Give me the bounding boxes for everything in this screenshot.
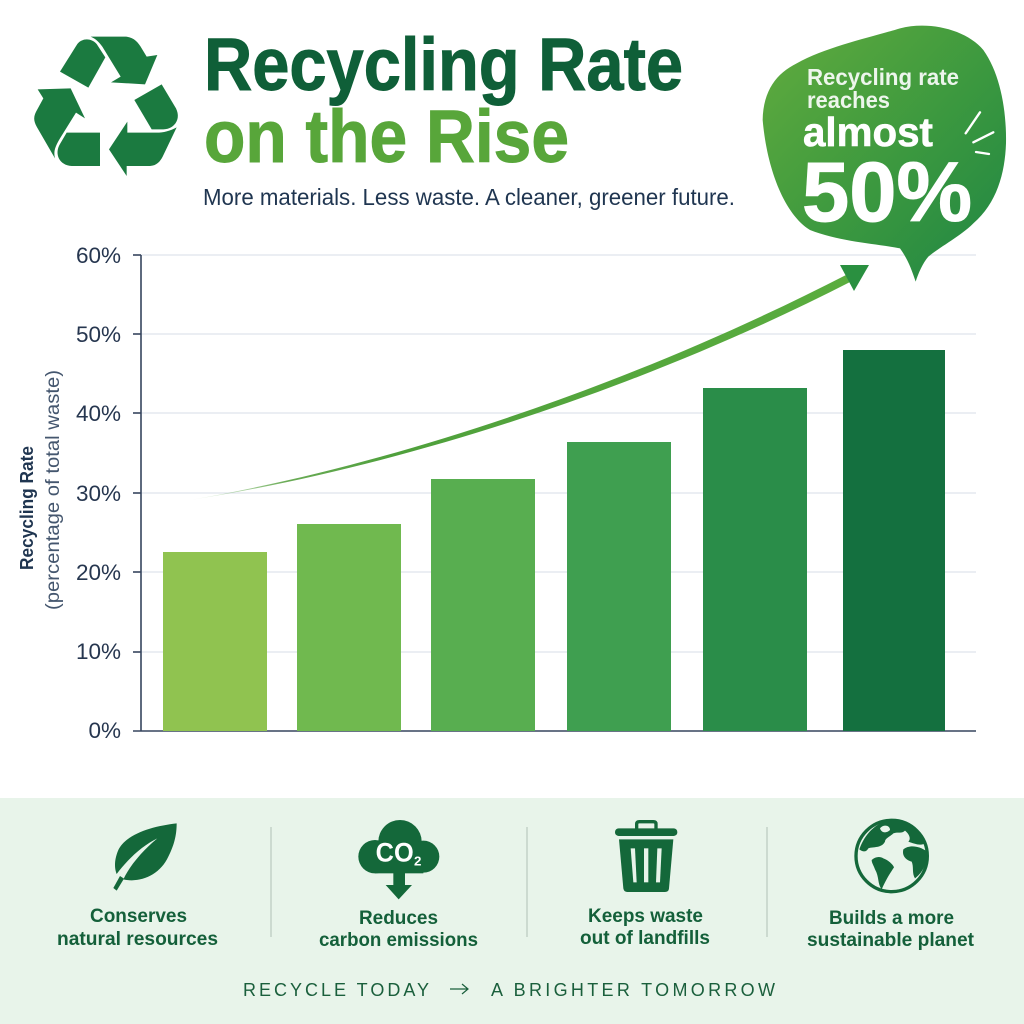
label: conserves: natural resources <box>57 928 218 950</box>
benefit: keeps waste out of landfills <box>580 822 710 949</box>
tagline: RECYCLE TODAY <box>243 980 429 1000</box>
benefit: builds a more sustainable planet <box>807 820 974 951</box>
label: builds: sustainable planet <box>807 929 974 951</box>
trend arrow <box>190 265 869 500</box>
label: conserves: Conserves <box>90 905 187 927</box>
y axis title: Recycling Rate <box>17 446 37 570</box>
icon: CO2 cloud: 2 <box>414 854 421 869</box>
y axis title: (percentage of total waste) <box>43 370 64 610</box>
y axis value labels: 50% <box>76 322 121 347</box>
label: keeps waste <box>580 905 710 949</box>
y axis gridlines and ticks <box>141 255 976 652</box>
icon: leaf <box>113 823 177 891</box>
benefit: reduces carbon emissions <box>319 820 478 951</box>
title <box>204 23 683 178</box>
tagline <box>243 980 775 1000</box>
label: keeps waste: out of landfills <box>580 927 710 949</box>
title: on the Rise <box>204 95 569 178</box>
callout bubble: reaches <box>807 87 890 113</box>
benefit: conserves natural resources <box>57 823 218 950</box>
label: builds <box>807 907 974 951</box>
icon: CO2 cloud <box>358 820 439 899</box>
icon detail: light land patch <box>880 826 890 832</box>
subtitle: More materials. Less waste. A cleaner, greener future. <box>203 184 735 210</box>
icon: globe <box>856 820 927 892</box>
tagline: A BRIGHTER TOMORROW <box>491 980 775 1000</box>
label: keeps waste: Keeps waste <box>588 905 703 927</box>
label: reduces: Reduces <box>359 907 438 929</box>
callout bubble: 50% <box>802 145 972 239</box>
axis lines <box>133 255 976 731</box>
y axis value labels: 60% <box>76 243 121 268</box>
y axis value labels: 30% <box>76 481 121 506</box>
label: reduces <box>319 907 478 951</box>
y axis value labels: 20% <box>76 560 121 585</box>
bars <box>163 350 945 731</box>
label: builds: Builds a more <box>829 907 954 929</box>
title: Recycling Rate <box>204 23 683 106</box>
y axis value labels: 10% <box>76 639 121 664</box>
callout bubble <box>763 26 1006 282</box>
icon: CO2 cloud: CO <box>376 838 414 868</box>
panel: benefits footer <box>0 798 1024 1024</box>
icon: trash can <box>615 822 677 892</box>
y axis value labels: 0% <box>88 718 121 743</box>
icon: recycling symbol <box>34 37 178 176</box>
label: conserves <box>57 905 218 950</box>
callout bubble: Recycling rate <box>807 64 959 90</box>
y axis title <box>17 370 64 610</box>
chart: recycling rate bars <box>17 243 976 743</box>
label: reduces: carbon emissions <box>319 929 478 951</box>
callout bubble: almost <box>803 109 933 155</box>
y axis value labels: 40% <box>76 401 121 426</box>
y axis value labels <box>76 243 121 743</box>
